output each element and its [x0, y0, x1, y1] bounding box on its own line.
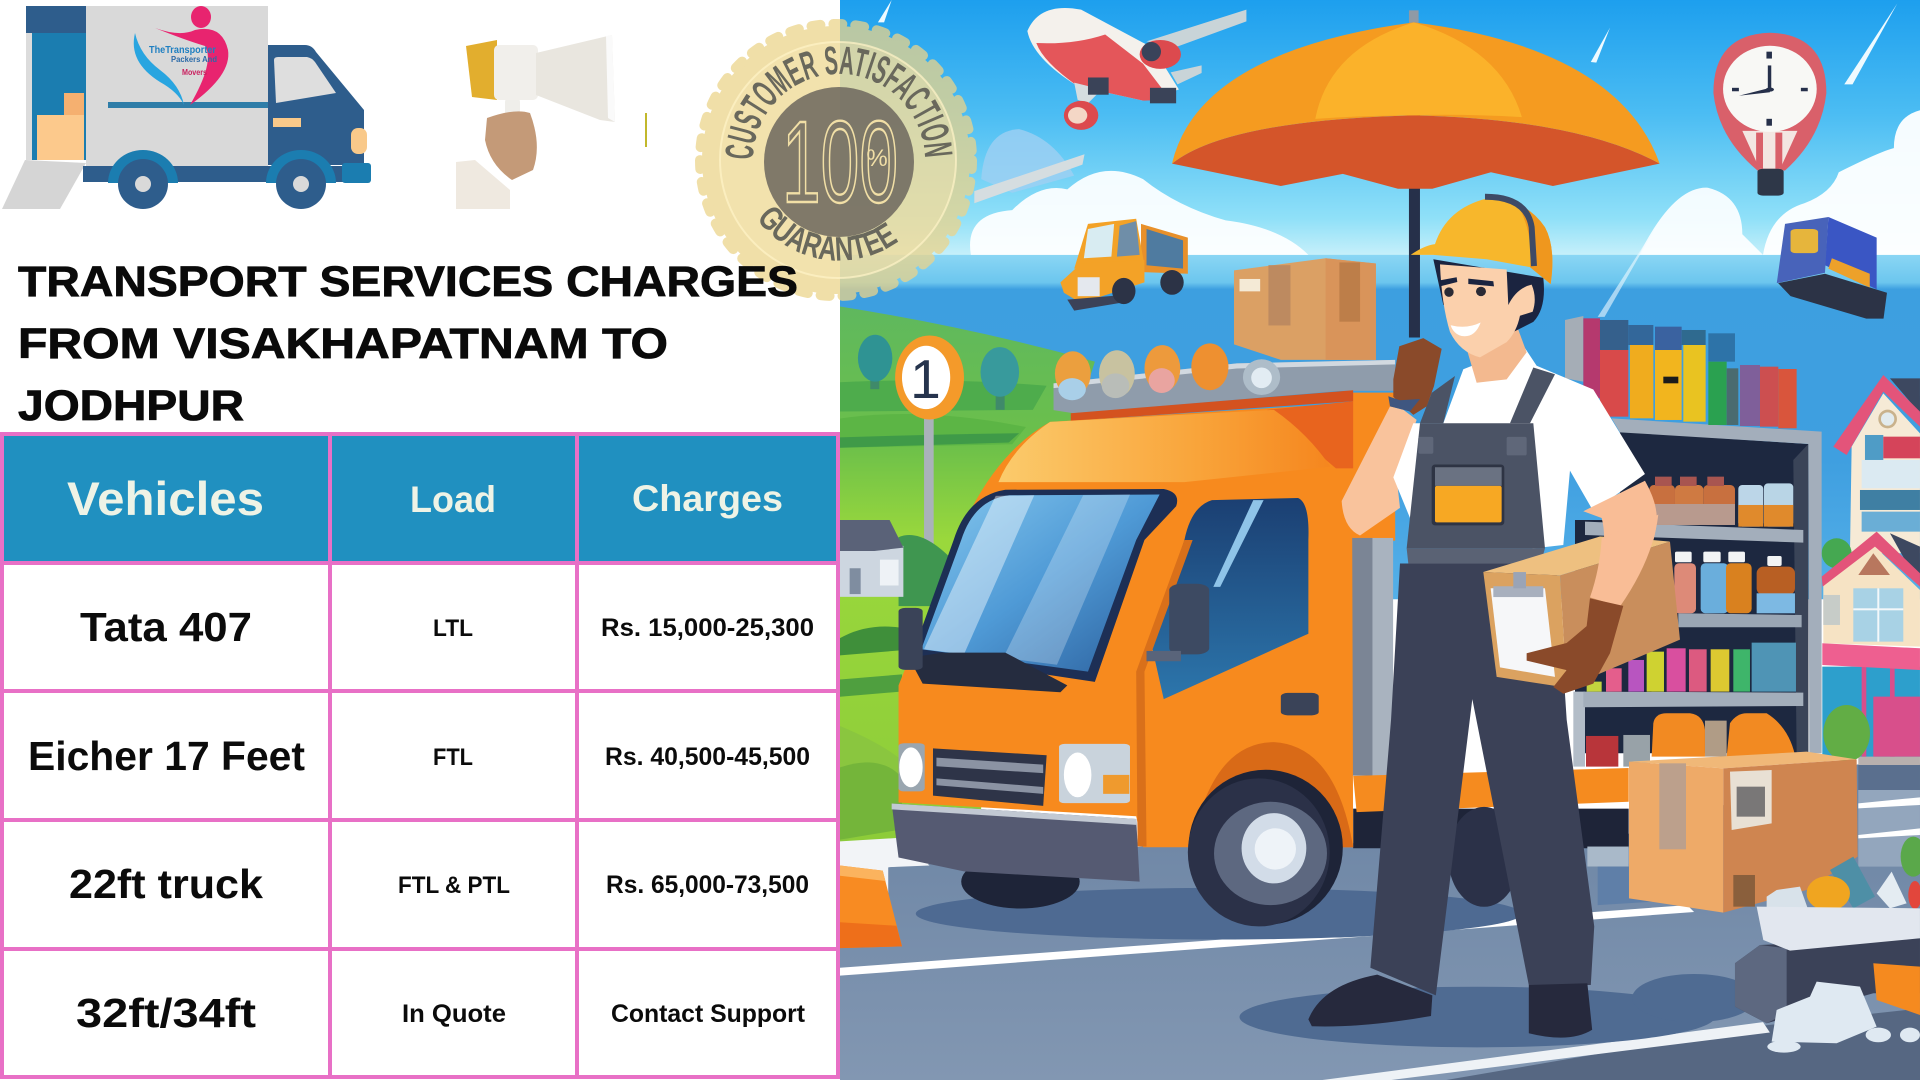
row: Tata 407: Tata 407	[80, 604, 252, 650]
road sign: 1	[910, 348, 941, 410]
small yellow truck	[1060, 219, 1188, 311]
title: JODHPUR	[18, 382, 244, 430]
seal centre	[764, 87, 914, 237]
large parcel on the road	[1629, 752, 1858, 913]
road surface	[840, 764, 1920, 1080]
grille	[933, 748, 1047, 806]
row: Tata 407	[80, 604, 814, 650]
company logo: Movers	[182, 68, 207, 77]
umbrella	[1172, 10, 1660, 338]
truck cab	[268, 45, 364, 165]
top row goods	[1565, 316, 1797, 428]
shelf frame	[1573, 418, 1822, 767]
goods crate at bottom right	[1735, 837, 1920, 1053]
company logo: TheTransporter	[149, 45, 216, 56]
parcel on the roof	[1234, 258, 1376, 360]
company logo: Packers And	[171, 55, 217, 64]
cab upper rear panel	[1267, 401, 1353, 468]
shirt	[1393, 346, 1645, 548]
row: Eicher 17 Feet: Eicher 17 Feet	[28, 733, 305, 779]
row: 32ft/34ft: Contact Support	[611, 1000, 806, 1028]
left arm	[1342, 406, 1417, 536]
icon: megaphone in hand	[456, 35, 647, 209]
bush by the road	[1823, 705, 1870, 762]
clock balloon	[1713, 33, 1826, 196]
row: Eicher 17 Feet	[28, 733, 810, 779]
worker upper body	[1342, 197, 1680, 694]
row: Tata 407: LTL	[433, 615, 473, 642]
company logo	[134, 6, 228, 105]
rack lights	[1055, 343, 1280, 400]
row: 32ft/34ft: 32ft/34ft	[76, 990, 256, 1036]
row: 22ft truck: 22ft truck	[69, 861, 263, 907]
logo truck	[2, 6, 371, 209]
neck	[1467, 325, 1527, 383]
traffic cone	[840, 865, 902, 948]
cab body	[899, 403, 1353, 847]
wheel arch and front wheel	[1188, 742, 1353, 926]
shoes	[1308, 975, 1592, 1038]
table header row: Charges	[632, 478, 783, 519]
panel: illustration of delivery worker and truck	[840, 0, 1920, 1080]
row: Eicher 17 Feet: Rs. 40,500-45,500	[605, 743, 810, 771]
windscreen	[912, 489, 1177, 682]
side window	[1151, 498, 1309, 699]
table header row: Load	[410, 479, 496, 520]
row: 22ft truck: Rs. 65,000-73,500	[606, 871, 809, 899]
lower house	[1822, 532, 1920, 757]
rear of truck: pillar and chassis	[1352, 393, 1629, 907]
bumper	[892, 803, 1140, 882]
seal top text: CUSTOMER SATISFACTION	[725, 46, 952, 158]
table: vehicle load and charges	[2, 434, 838, 1077]
badge: customer satisfaction guarantee seal	[695, 19, 977, 301]
door line and handle	[1136, 540, 1319, 847]
wipers	[909, 653, 1067, 692]
sea	[840, 255, 1920, 599]
third row bottles	[1674, 552, 1795, 613]
right forearm over parcel	[1590, 515, 1658, 607]
table header row	[2, 434, 838, 562]
trees	[858, 335, 1019, 410]
raised glove	[1388, 338, 1442, 415]
overall bib and straps	[1407, 368, 1555, 564]
road markings at right	[1858, 753, 1920, 867]
trousers	[1370, 563, 1594, 995]
table grid	[2, 434, 838, 1077]
row: Tata 407: Rs. 15,000-25,300	[601, 614, 814, 642]
row: 22ft truck	[69, 861, 809, 907]
row: 32ft/34ft: In Quote	[402, 1000, 506, 1028]
title: TRANSPORT SERVICES CHARGES	[18, 258, 798, 306]
second row bottles	[1649, 477, 1793, 527]
fifth row goods	[1586, 713, 1795, 767]
head	[1433, 259, 1544, 357]
mirror	[899, 584, 1209, 670]
road sign	[895, 335, 964, 587]
shelf and buildings	[1565, 316, 1920, 767]
seal value: 100	[782, 97, 898, 227]
right forearm	[1583, 481, 1657, 607]
roof rack	[1054, 360, 1395, 421]
hill and grass	[840, 307, 1095, 861]
second airplane wing	[974, 154, 1085, 203]
green bush behind house	[1822, 538, 1852, 568]
row: 22ft truck: FTL & PTL	[398, 872, 510, 899]
right glove	[1527, 598, 1623, 694]
row: 32ft/34ft	[76, 990, 806, 1036]
row: Eicher 17 Feet: FTL	[433, 744, 473, 771]
airplane	[1027, 8, 1246, 130]
seal bottom text: GUARANTEE	[760, 208, 898, 261]
rain streaks	[878, 0, 1897, 317]
upper house	[1833, 375, 1920, 553]
truck cargo body	[86, 6, 268, 166]
sky background	[840, 0, 1920, 257]
truck wheels	[108, 150, 336, 209]
cab roof highlight	[998, 410, 1330, 482]
front tyre	[961, 855, 1080, 909]
held parcel	[1483, 537, 1680, 688]
title	[18, 258, 798, 430]
seal percent sign: %	[866, 145, 888, 172]
fourth row goods	[1587, 643, 1796, 692]
headlights	[899, 743, 1130, 803]
clouds	[970, 110, 1920, 255]
hard hat	[1411, 197, 1552, 284]
small blue truck	[1777, 217, 1887, 319]
truck cab	[892, 258, 1395, 926]
hedges and bushes	[840, 627, 902, 841]
title: FROM VISAKHAPATNAM TO	[18, 320, 668, 368]
table header row: Vehicles	[67, 472, 264, 525]
small house and hedge	[840, 520, 957, 606]
